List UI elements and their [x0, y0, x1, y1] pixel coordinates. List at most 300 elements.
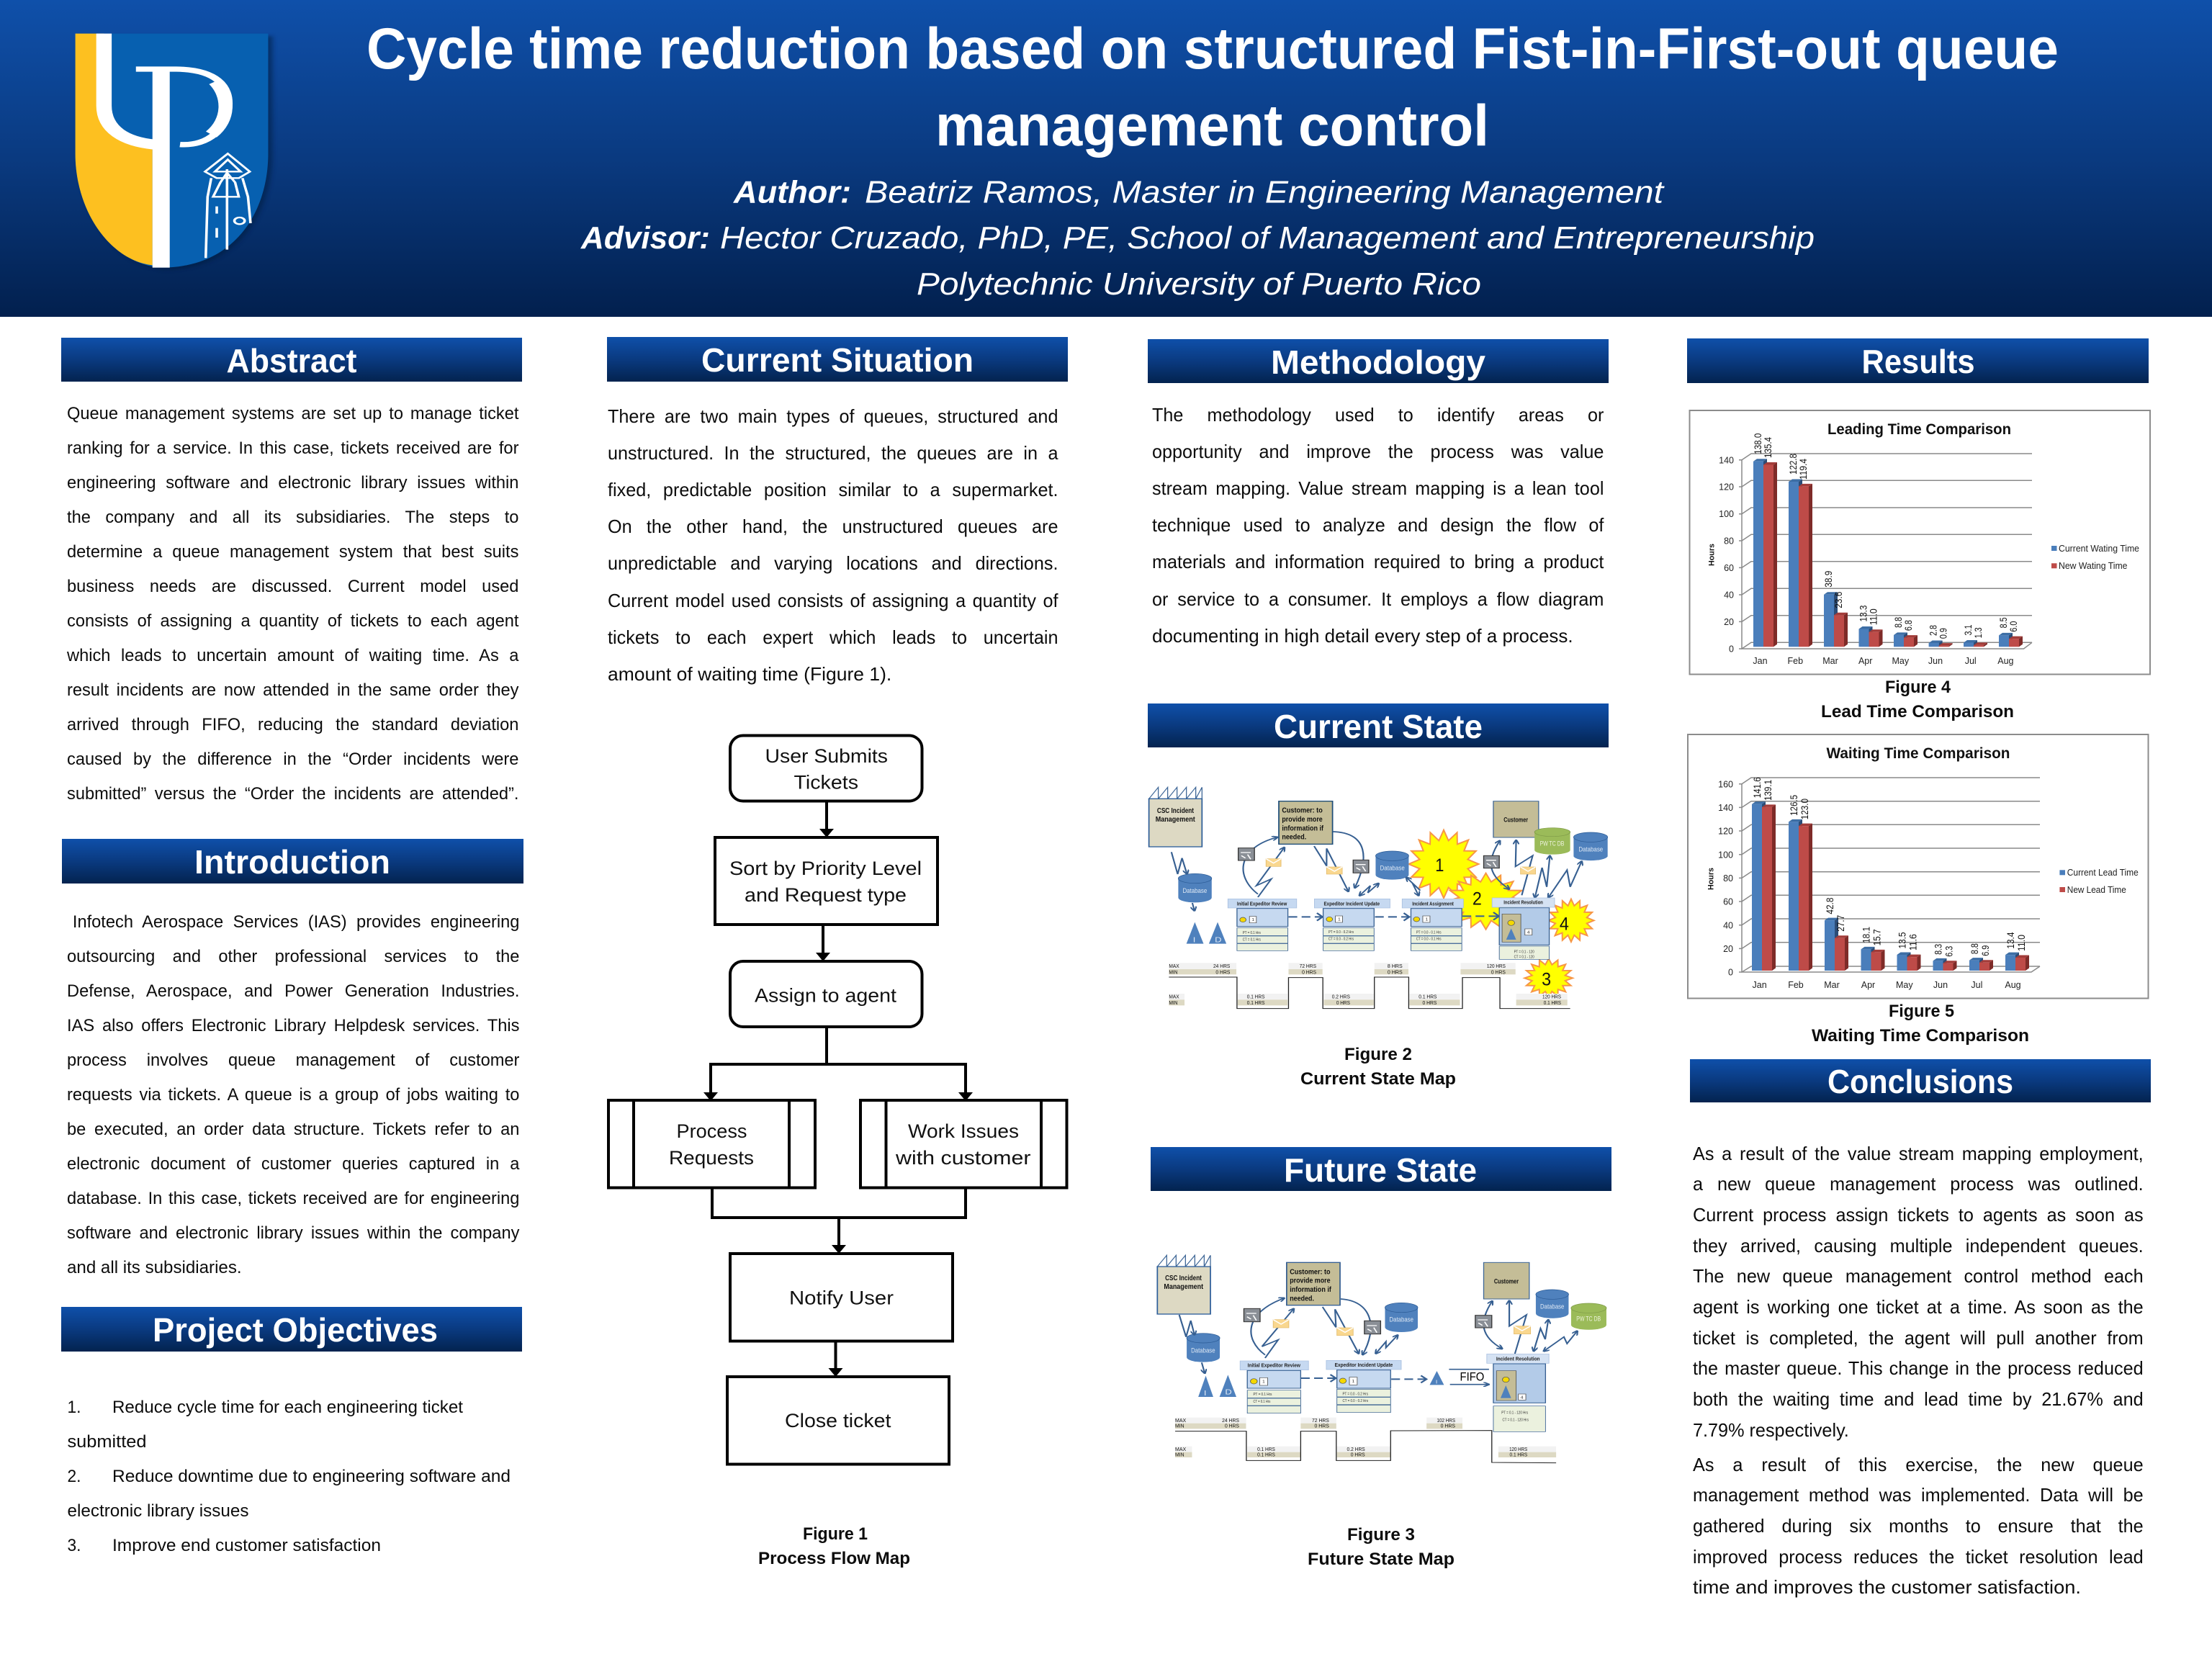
process: incident assignment: PT = 0.0 - 0.1 Hrs — [1416, 931, 1442, 935]
flow node: process requests — [608, 1100, 815, 1188]
data labels: 8.5 — [1997, 617, 2009, 628]
y axis labels: 160 — [1718, 779, 1733, 789]
legend — [2059, 868, 2139, 895]
timeline: waiting and processing times: 120 HRS — [1542, 994, 1562, 999]
factory: CSC incident management — [1149, 787, 1202, 847]
chart: leading time comparison — [1689, 410, 2150, 674]
caption: figure 3: Future State Map — [1308, 1550, 1455, 1569]
flow node: work issues with customer — [860, 1100, 1067, 1188]
process: initial expeditor review: CT = 0.1 Hrs — [1253, 1401, 1270, 1404]
y axis labels — [1719, 455, 1734, 654]
heading: Introduction — [62, 839, 523, 884]
heading: Methodology: Methodology — [1271, 343, 1485, 381]
process: incident resolution: Incident Resolution — [1496, 1355, 1540, 1362]
flow node: work issues with customer: with customer — [895, 1147, 1031, 1169]
cylinder: database middle — [1375, 851, 1408, 880]
factory: CSC incident management: CSC Incident — [1165, 1274, 1202, 1282]
heading: Results — [1687, 338, 2149, 383]
data labels: 27.7 — [1835, 915, 1846, 932]
text: abstract body: ranking for a service. In this case, tickets received are for — [67, 438, 518, 458]
text: introduction body: software and electronic library issues within the company — [66, 1223, 519, 1243]
text: current situation body: On the other hand, the unstructured queues are — [608, 517, 1058, 537]
heading: Abstract: Abstract — [226, 342, 357, 379]
burst numbers: 1 — [1435, 855, 1444, 876]
text: abstract body — [67, 403, 518, 804]
x axis labels: Aug — [2005, 980, 2021, 990]
text: current situation body: tickets to each expert which leads to uncertain — [608, 628, 1058, 648]
data labels: 119.4 — [1797, 459, 1809, 480]
data labels: 122.8 — [1787, 454, 1799, 475]
burst numbers: 2 — [1473, 889, 1482, 909]
process: incident resolution — [1487, 1354, 1549, 1431]
timeline: waiting and processing times: 8 HRS — [1388, 963, 1403, 969]
caption: figure 5: Waiting Time Comparison — [1812, 1026, 2029, 1046]
timeline: waiting and processing times: 120 HRS — [1487, 963, 1506, 969]
text: introduction body: IAS also offers Electronic Library Helpdesk services. This — [66, 1016, 519, 1035]
process: initial expeditor review: PT = 0.1 Hrs — [1243, 932, 1261, 935]
y axis labels — [1718, 779, 1733, 978]
text: current situation body: Current model used consists of assigning a quantity of — [608, 591, 1058, 611]
x axis labels: Mar — [1824, 980, 1840, 990]
legend — [2051, 544, 2139, 571]
data labels: 42.8 — [1824, 897, 1835, 914]
timeline: waiting and processing times: MIN — [1169, 969, 1178, 975]
process: expeditor incident update: CT = 0.0 - 0.2 Hrs — [1342, 1400, 1368, 1403]
text: abstract body: result incidents are now attended in the same order they — [67, 680, 518, 700]
flow node: user submits tickets: Tickets — [793, 772, 858, 793]
process: initial expeditor review: Initial Expeditor Review — [1237, 900, 1287, 907]
mail icons — [1266, 859, 1535, 874]
legend: Current Lead Time — [2067, 868, 2139, 878]
data labels: 138.0 — [1752, 433, 1763, 454]
box: customer to provide more information — [1279, 801, 1333, 844]
cylinder: database middle: Database — [1380, 865, 1405, 872]
burst numbers: 3 — [1542, 970, 1551, 989]
author and affiliation lines: Beatriz Ramos, Master in Engineering Management — [865, 175, 1665, 210]
flow node: process requests: Process — [677, 1120, 747, 1142]
text: methodology body: The methodology used to identify areas or — [1152, 405, 1604, 425]
timeline: waiting and processing times: 0 HRS — [1388, 969, 1403, 975]
process: initial expeditor review: 1 — [1262, 1380, 1266, 1384]
process: incident resolution: Incident Resolution — [1503, 899, 1543, 905]
caption: figure 2: Current State Map — [1300, 1069, 1456, 1089]
y axis labels: 0 — [1729, 644, 1734, 654]
text: abstract body: submitted” versus the “Order the incidents are attended”. — [67, 783, 518, 804]
y axis labels: 120 — [1719, 482, 1734, 493]
inventory triangles I and D — [1198, 1371, 1444, 1398]
text: methodology body — [1152, 405, 1604, 647]
text: methodology body: stream mapping. Value stream mapping is a lean tool — [1152, 479, 1604, 499]
process: incident resolution: CT = 0.1 - 120 — [1514, 956, 1534, 959]
process: expeditor incident update: PT = 0.0 - 0.2 Hrs — [1342, 1393, 1368, 1396]
x axis labels: Mar — [1822, 656, 1838, 666]
mail icons — [1273, 1320, 1531, 1336]
text: project objectives list: 3. — [68, 1536, 81, 1555]
heading: Introduction: Introduction — [194, 843, 390, 881]
connector arrows — [1179, 1298, 1578, 1373]
flow node: user submits tickets: User Submits — [765, 745, 888, 767]
timeline: waiting and processing times: 0 HRS — [1491, 969, 1506, 975]
text: abstract body: determine a queue management system that best suits — [67, 541, 518, 562]
arrow: sort to assign — [816, 925, 830, 961]
text: abstract body: business needs are discussed. Current model used — [67, 576, 518, 596]
box: customer to provide more information: provide more — [1290, 1277, 1331, 1285]
text: introduction body: requests via tickets. A queue is a group of jobs waiting to — [66, 1085, 519, 1105]
text: methodology body: materials and information required to bring a product — [1152, 552, 1604, 572]
process: incident resolution: PT = 0.1 - 120 — [1514, 950, 1534, 954]
process: initial expeditor review: Initial Expeditor Review — [1248, 1362, 1300, 1368]
FIFO lane arrows and label: FIFO — [1460, 1371, 1484, 1384]
arrow: submit to sort — [819, 801, 834, 837]
flow node: sort by priority — [715, 837, 938, 925]
process: expeditor incident update: PT = 0.0 - 0.2 Hrs — [1328, 931, 1354, 935]
box: customer to provide more information: needed. — [1282, 833, 1306, 841]
heading: Project Objectives — [61, 1307, 522, 1352]
text: conclusions paragraph one: both the waiting time and lead time by 21.67% and — [1693, 1388, 2144, 1410]
flow node: user submits tickets — [730, 736, 922, 801]
flow node: close ticket: Close ticket — [785, 1410, 891, 1431]
y axis labels: 40 — [1724, 590, 1734, 601]
inventory triangles I and D: I — [1436, 1378, 1437, 1385]
cylinder: database left — [1178, 873, 1212, 902]
y axis labels: 80 — [1724, 536, 1734, 546]
x axis labels: Jun — [1928, 656, 1943, 666]
y axis labels: 60 — [1723, 897, 1733, 907]
timeline: waiting and processing times: 0.1 HRS — [1510, 1452, 1528, 1457]
heading: Conclusions — [1690, 1059, 2151, 1102]
text: conclusions paragraph one: As a result of the value stream mapping employment, — [1693, 1142, 2144, 1164]
timeline: waiting and processing times: 0.1 HRS — [1544, 1000, 1562, 1006]
text: current situation body — [608, 406, 1058, 685]
header banner — [0, 0, 2212, 317]
heading: Future State: Future State — [1284, 1151, 1477, 1189]
process: incident resolution — [1492, 898, 1555, 959]
burst numbers — [1435, 855, 1569, 989]
y axis labels: 140 — [1719, 455, 1734, 465]
flow node: notify user — [730, 1254, 953, 1341]
text: introduction body: process involves queue management of customer — [66, 1051, 519, 1070]
x axis labels: May — [1896, 980, 1913, 990]
text: methodology body: opportunity and improve the process was value — [1152, 442, 1604, 462]
timeline: waiting and processing times: 0.1 HRS — [1257, 1447, 1275, 1452]
box: customer to provide more information: Customer: to — [1290, 1268, 1331, 1276]
text: current situation body: unpredictable and varying locations and directions. — [608, 554, 1058, 574]
text: current situation body: There are two main types of queues, structured and — [608, 406, 1058, 426]
text: current situation body: unstructured. In the structured, the queues are in a — [608, 444, 1058, 464]
x axis labels: Feb — [1788, 656, 1803, 666]
text: abstract body: caused by the difference in the “Order incidents were — [67, 749, 518, 769]
timeline: waiting and processing times: MAX — [1169, 963, 1179, 969]
text: abstract body: which leads to uncertain amount of waiting time. As a — [67, 645, 518, 665]
text: conclusions paragraph one: Current process assign tickets to agents as soon as — [1693, 1204, 2144, 1226]
x axis labels — [1753, 980, 2021, 990]
data labels: 38.9 — [1822, 571, 1834, 588]
dashed push arrows — [1301, 1375, 1426, 1382]
text: conclusions paragraph one — [1693, 1142, 2144, 1441]
burst numbers: 4 — [1560, 914, 1569, 935]
timeline: waiting and processing times: 0 HRS — [1441, 1424, 1456, 1429]
timeline: waiting and processing times: 0.1 HRS — [1419, 994, 1437, 999]
timeline: waiting and processing times: 0 HRS — [1336, 1000, 1350, 1006]
timeline: waiting and processing times: MAX — [1175, 1447, 1187, 1452]
data labels: 6.3 — [1943, 946, 1954, 957]
text: conclusions paragraph two: improved process reduces the ticket resolution lead — [1693, 1546, 2144, 1568]
process: incident assignment: CT = 0.0 - 0.1 Hrs — [1416, 938, 1442, 941]
title: management control — [935, 94, 1489, 158]
process: incident assignment: 1 — [1425, 917, 1429, 922]
x axis labels: Feb — [1788, 980, 1804, 990]
x axis labels: Jan — [1753, 656, 1768, 666]
legend: New Wating Time — [2059, 561, 2128, 571]
timeline: waiting and processing times — [1175, 1418, 1556, 1463]
text: conclusions paragraph one: 7.79% respectively. — [1693, 1419, 1849, 1441]
text: project objectives list: submitted — [68, 1432, 147, 1452]
text: project objectives list: 2. — [68, 1467, 81, 1486]
heading: Current State — [1148, 703, 1609, 747]
x axis labels: Apr — [1858, 656, 1872, 666]
x axis labels: Aug — [1997, 656, 2014, 666]
cylinder: database right: Database — [1540, 1303, 1564, 1310]
caption: figure 3 — [1308, 1525, 1455, 1569]
timeline: waiting and processing times: 0 HRS — [1225, 1424, 1239, 1429]
y axis labels: 80 — [1723, 873, 1733, 884]
arrow: merge to notify — [712, 1188, 966, 1254]
flow node: sort by priority: and Request type — [745, 884, 907, 906]
data labels: 11.0 — [2015, 935, 2027, 951]
cylinder: database left: Database — [1182, 887, 1207, 895]
timeline: waiting and processing times: 0.2 HRS — [1347, 1447, 1365, 1452]
burst markers 1 to 4 background — [1408, 830, 1594, 997]
flow node: notify user: Notify User — [789, 1287, 894, 1309]
data labels: 8.8 — [1892, 617, 1904, 628]
author and affiliation lines: Author: — [733, 175, 851, 210]
chart: waiting time comparison: Waiting Time Comparison — [1826, 745, 2010, 762]
factory: CSC incident management: Management — [1156, 815, 1195, 824]
data labels: 6.9 — [1979, 945, 1991, 956]
data labels: 126.5 — [1788, 795, 1799, 816]
timeline: waiting and processing times: MAX — [1169, 994, 1179, 999]
y axis labels: 20 — [1724, 617, 1734, 627]
heading: Conclusions: Conclusions — [1827, 1063, 2013, 1100]
chart: waiting time comparison — [1688, 734, 2149, 998]
data labels: 6.0 — [2008, 621, 2019, 632]
box: customer to provide more information: provide more — [1282, 815, 1323, 824]
text: methodology body: technique used to analyze and design the flow of — [1152, 516, 1604, 536]
box: customer — [1493, 801, 1539, 837]
data labels: 139.1 — [1762, 780, 1773, 801]
process: initial expeditor review: 1 — [1251, 918, 1255, 922]
timeline: waiting and processing times — [1169, 963, 1570, 1009]
cylinder: database right — [1536, 1290, 1568, 1318]
text: project objectives list: 1. — [68, 1398, 81, 1417]
y axis labels: 100 — [1719, 509, 1734, 519]
factory: CSC incident management: CSC Incident — [1157, 806, 1194, 815]
timeline: waiting and processing times: 72 HRS — [1300, 963, 1317, 969]
data labels: 15.7 — [1871, 929, 1882, 945]
x axis labels — [1753, 656, 2014, 666]
process: expeditor incident update: 1 — [1338, 917, 1341, 922]
data labels: 11.6 — [1907, 934, 1918, 950]
timeline: waiting and processing times: 24 HRS — [1213, 963, 1231, 969]
flowchart: process flow map — [608, 736, 1067, 1465]
text: introduction body: be executed, an order data structure. Tickets refer to an — [66, 1120, 519, 1139]
heading: Current Situation — [607, 337, 1068, 382]
text: introduction body: electronic document of customer queries captured in a — [66, 1154, 519, 1174]
text: abstract body: consists of assigning a quantity of tickets to each agent — [67, 611, 518, 631]
caption: figure 1 — [758, 1524, 910, 1568]
data labels: 123.0 — [1799, 799, 1810, 819]
caption: figure 2: Figure 2 — [1344, 1045, 1412, 1064]
text: abstract body: the company and all its subsidiaries. The steps to — [67, 507, 518, 527]
data labels: 2.8 — [1928, 625, 1939, 636]
timeline: waiting and processing times: 72 HRS — [1312, 1418, 1329, 1424]
author and affiliation lines: Advisor: — [580, 220, 710, 256]
heading: Future State — [1151, 1147, 1611, 1191]
timeline: waiting and processing times: 0.1 HRS — [1247, 1000, 1265, 1006]
timeline: waiting and processing times: MIN — [1175, 1452, 1184, 1457]
text: conclusions paragraph one: ticket is completed, the agent will pull another from — [1693, 1327, 2144, 1349]
text: abstract body: arrived through FIFO, reducing the standard deviation — [67, 714, 518, 734]
cylinder: PW TC DB — [1534, 828, 1570, 855]
data labels: 135.4 — [1762, 437, 1773, 458]
flow node: work issues with customer: Work Issues — [908, 1120, 1019, 1142]
box: customer to provide more information: needed. — [1290, 1295, 1314, 1303]
text: introduction body: Defense, Aerospace, and Power Generation Industries. — [66, 981, 519, 1001]
bars: current and new — [1752, 801, 2029, 971]
text: conclusions paragraph one: agent is working one ticket at a time. As soon as the — [1693, 1296, 2144, 1318]
timeline: waiting and processing times: 0.2 HRS — [1332, 994, 1350, 999]
y axis labels: 60 — [1724, 563, 1734, 573]
bars: current and new — [1753, 459, 2023, 647]
process: incident resolution: PT = 0.1 - 120 Hrs — [1501, 1411, 1528, 1415]
process: expeditor incident update: Expeditor Incident Update — [1335, 1362, 1393, 1368]
caption: figure 3: Figure 3 — [1347, 1525, 1415, 1545]
data labels: 13.4 — [2005, 932, 2016, 949]
process: incident resolution: 4 — [1521, 1395, 1524, 1400]
FIFO lane arrows and label — [1449, 1370, 1489, 1385]
text: current situation body: amount of waiting time (Figure 1). — [608, 665, 891, 685]
text: project objectives list: Improve end customer satisfaction — [112, 1536, 381, 1555]
text: introduction body — [66, 912, 520, 1277]
timeline: waiting and processing times: 0 HRS — [1302, 969, 1317, 975]
text: project objectives list: Reduce downtime due to engineering software and — [112, 1467, 511, 1486]
author and affiliation lines — [580, 175, 1815, 302]
text: project objectives list — [68, 1398, 511, 1555]
author and affiliation lines: Hector Cruzado, PhD, PE, School of Management and Entrepreneurship — [720, 220, 1815, 256]
text: conclusions paragraph two: management method was implemented. Data will be — [1693, 1484, 2144, 1506]
caption: figure 5: Figure 5 — [1889, 1002, 1954, 1021]
data labels: 18.1 — [1861, 927, 1872, 943]
cylinder: database right — [1573, 832, 1608, 860]
box: customer: Customer — [1503, 817, 1529, 824]
cylinder: PW TC DB: PW TC DB — [1540, 840, 1564, 848]
process: initial expeditor review — [1240, 1361, 1308, 1413]
process: initial expeditor review: CT = 0.1 Hrs — [1243, 938, 1261, 942]
timeline: waiting and processing times: 0.1 HRS — [1257, 1452, 1275, 1457]
text: project objectives list: electronic library issues — [68, 1501, 249, 1521]
caption: figure 4: Figure 4 — [1885, 678, 1951, 697]
timeline: waiting and processing times: 0 HRS — [1351, 1452, 1365, 1457]
data labels: 1.3 — [1972, 627, 1984, 638]
heading: Project Objectives: Project Objectives — [153, 1311, 438, 1349]
timeline: waiting and processing times: MIN — [1175, 1424, 1184, 1429]
fax icons — [1238, 848, 1499, 873]
legend: Current Wating Time — [2059, 544, 2139, 554]
y axis title: Hours — [1707, 868, 1715, 890]
cylinder: database middle — [1385, 1303, 1418, 1332]
heading: Current State: Current State — [1274, 708, 1483, 745]
timeline: waiting and processing times: 0.1 HRS — [1247, 994, 1265, 999]
data labels: 8.8 — [1969, 943, 1980, 954]
data labels: 0.9 — [1938, 628, 1949, 639]
dashed push arrows — [1288, 912, 1499, 921]
timeline: waiting and processing times: 0 HRS — [1215, 969, 1231, 975]
caption: figure 4 — [1821, 678, 2014, 721]
process: initial expeditor review: PT = 0.1 Hrs — [1253, 1393, 1272, 1397]
chart: leading time comparison: Leading Time Comparison — [1827, 421, 2011, 438]
text: current situation body: fixed, predictable position similar to a supermarket. — [608, 480, 1058, 500]
y axis labels: 20 — [1723, 944, 1733, 954]
text: conclusions paragraph one: they arrived, causing multiple independent queues. — [1693, 1235, 2144, 1256]
title — [367, 17, 2059, 158]
data labels — [1752, 433, 2019, 639]
y axis title: Hours — [1708, 544, 1717, 566]
title: Cycle time reduction based on structured Fist-in-First-out queue — [367, 17, 2059, 81]
text: conclusions paragraph two: gathered during six months to ensure that the — [1693, 1515, 2144, 1537]
cylinder: database left — [1187, 1334, 1220, 1362]
timeline: waiting and processing times: 0 HRS — [1314, 1424, 1329, 1429]
data labels: 13.3 — [1858, 605, 1869, 622]
caption: figure 4: Lead Time Comparison — [1821, 702, 2014, 721]
x axis labels: Jan — [1753, 980, 1767, 990]
timeline: waiting and processing times: MIN — [1169, 1000, 1178, 1006]
chart gridlines and axes — [1739, 778, 2040, 972]
x axis labels: May — [1892, 656, 1910, 666]
author and affiliation lines: Polytechnic University of Puerto Rico — [917, 266, 1481, 302]
text: introduction body: and all its subsidiaries. — [66, 1258, 241, 1277]
logo: university shield — [75, 33, 275, 270]
legend: New Lead Time — [2067, 885, 2126, 895]
figure 2: current state map — [1148, 459, 1980, 1010]
data labels: 3.1 — [1962, 624, 1974, 635]
inventory triangles I and D: I — [1193, 936, 1195, 944]
flow node: assign to agent: Assign to agent — [755, 985, 897, 1007]
data labels — [1751, 777, 2027, 957]
x axis labels: Jun — [1933, 980, 1948, 990]
flow node: process requests: Requests — [669, 1147, 754, 1169]
arrows: split to two processes — [703, 1027, 973, 1101]
timeline: waiting and processing times: 0 HRS — [1423, 1000, 1437, 1006]
timeline: waiting and processing times: MAX — [1175, 1418, 1187, 1424]
text: conclusions paragraph one: the master queue. This change in the process reduced — [1693, 1357, 2144, 1379]
process: incident resolution: 4 — [1527, 930, 1530, 935]
inventory triangles I and D: D — [1215, 936, 1222, 944]
factory: CSC incident management — [1157, 1255, 1210, 1314]
text: project objectives list: Reduce cycle time for each engineering ticket — [112, 1398, 463, 1417]
figure 3: future state map — [1156, 1254, 1607, 1463]
inventory triangles I and D: I — [1204, 1389, 1207, 1398]
process: initial expeditor review — [1228, 899, 1297, 950]
x axis labels: Jul — [1971, 980, 1982, 990]
process: expeditor incident update — [1314, 899, 1390, 950]
text: conclusions paragraph one: The new queue management control method each — [1693, 1265, 2144, 1287]
factory: CSC incident management: Management — [1164, 1282, 1203, 1291]
flow node: close ticket — [727, 1377, 949, 1465]
timeline: waiting and processing times: 120 HRS — [1509, 1447, 1528, 1452]
cylinder: database middle: Database — [1390, 1316, 1413, 1323]
box: customer — [1484, 1262, 1529, 1299]
data labels: 6.8 — [1902, 620, 1914, 631]
